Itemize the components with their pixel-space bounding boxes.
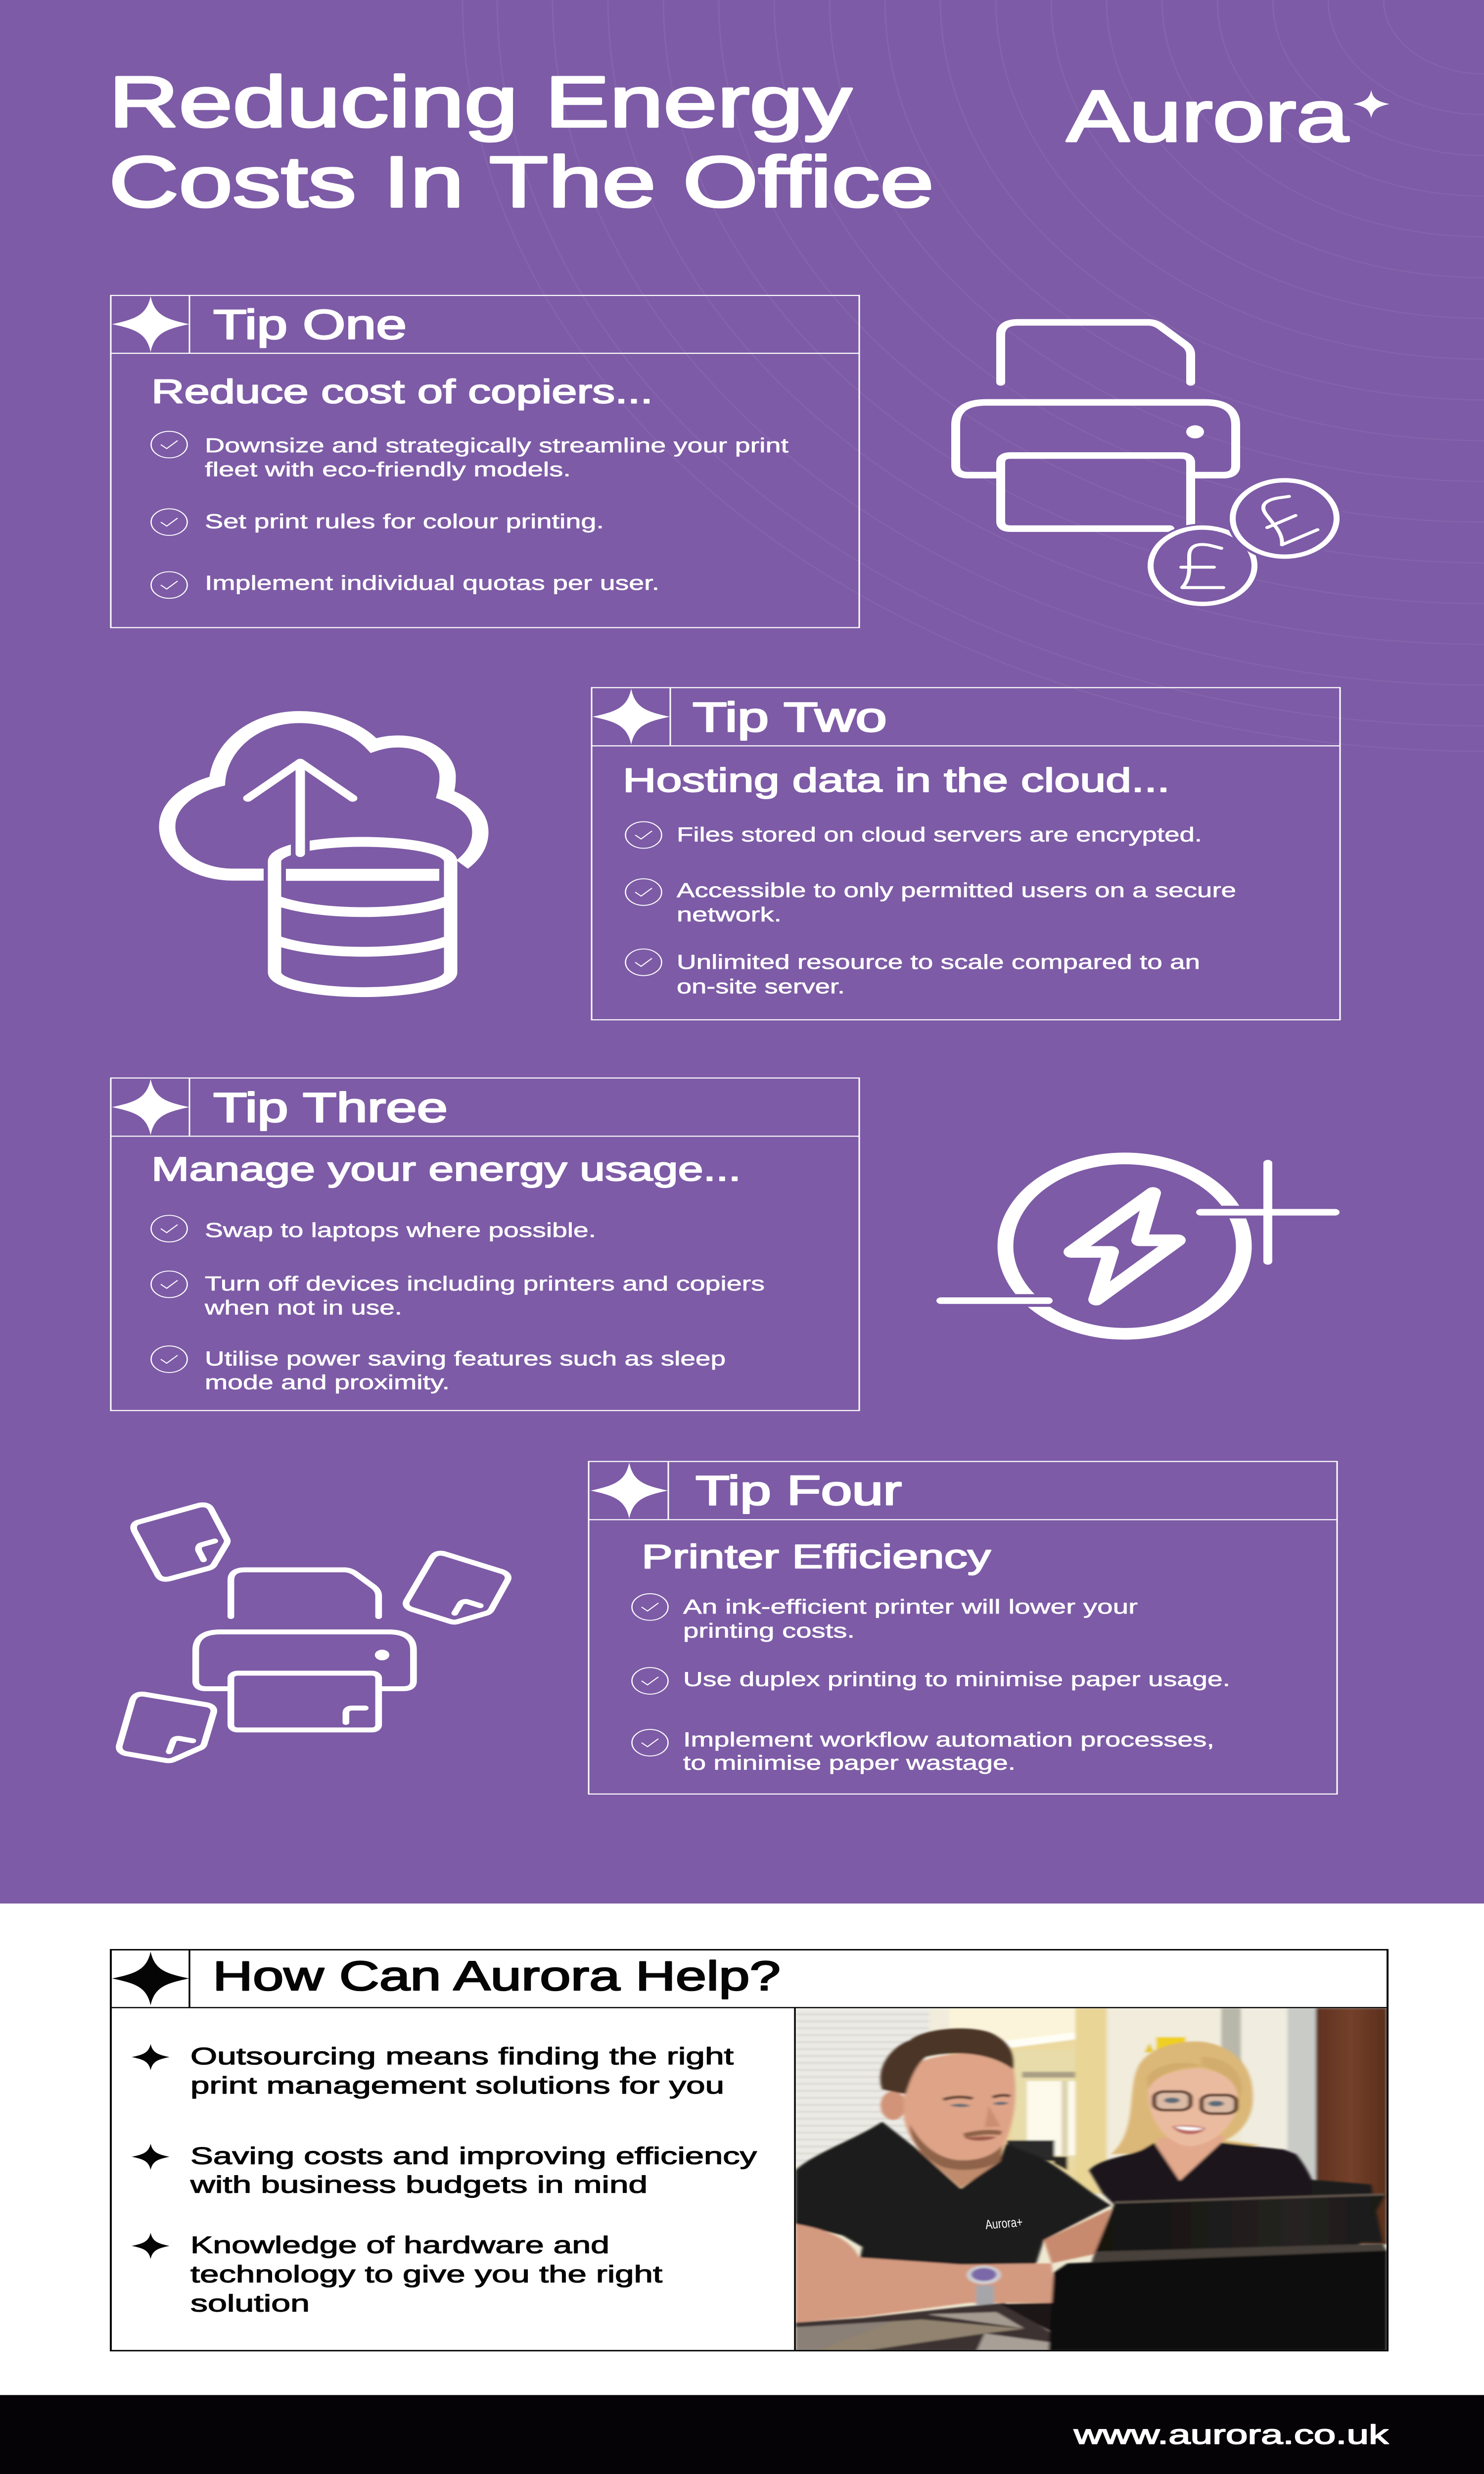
heading: How Can Aurora Help? [213,1953,781,1999]
title: Costs In The Office [109,142,934,222]
check item 2: when not in use. [204,1297,402,1319]
check item 1 [151,431,789,481]
heading: tip two: Tip Two [693,694,887,740]
check item 1: Downsize and strategically streamline your print [205,434,789,457]
check item 3 [632,1728,1214,1774]
icon: black star [112,1951,189,2005]
subheading: Manage your energy usage... [151,1151,741,1188]
check item 1 [632,1594,1138,1642]
icon: cloud upload with database [167,717,480,992]
subheading: Printer Efficiency [642,1538,991,1575]
check item 3 [625,949,1200,998]
icon: star [112,1079,189,1135]
bullet 3: solution [190,2290,310,2317]
bullet 3: technology to give you the right [190,2261,662,2287]
subheading: Hosting data in the cloud... [623,762,1170,799]
purple background [0,0,1484,1903]
check item 1: Swap to laptops where possible. [205,1219,596,1241]
bullet 3: Knowledge of hardware and [190,2232,609,2259]
check item 1: Files stored on cloud servers are encrypted. [677,824,1202,846]
heading: tip three: Tip Three [213,1085,448,1131]
heading: tip four: Tip Four [696,1468,902,1514]
panel: tip one [111,295,859,627]
check item 3: Unlimited resource to scale compared to an [677,951,1200,973]
shirt logo on photo: Aurora+ [984,2214,1023,2232]
check item 2: Turn off devices including printers and copiers [205,1273,765,1295]
check item 2 [625,879,1236,926]
bullet 2: Saving costs and improving efficiency [190,2143,757,2169]
logo: Aurora: Aurora [1067,76,1348,157]
white section background [0,1903,1484,2395]
check item 1: An ink-efficient printer will lower your [683,1596,1138,1618]
chair [1312,2180,1383,2242]
panel: how can aurora help [111,1950,1388,2351]
table [795,2303,1052,2351]
check item 2: Set print rules for colour printing. [205,511,604,533]
icon: printer with paper sheets [119,1505,508,1760]
icon: energy bolt in circle [941,1158,1335,1334]
panel: tip four [589,1462,1337,1794]
heading: tip one: Tip One [213,302,407,348]
bullet 1 [132,2043,734,2099]
check item 3: on-site server. [677,975,845,998]
footer bar [0,2395,1484,2474]
check item 3: mode and proximity. [205,1371,450,1394]
footer url: www.aurora.co.uk [1073,2420,1389,2450]
check item 2 [151,1271,765,1319]
subheading: Reduce cost of copiers... [151,373,653,411]
arms [795,2224,1056,2323]
check item 2: Use duplex printing to minimise paper usage. [683,1668,1230,1691]
icon: star [591,1463,668,1519]
man [795,2122,1111,2265]
check item 2: network. [677,904,782,926]
bullet 1: print management solutions for you [190,2072,724,2099]
title [109,61,934,222]
check item 3: Implement workflow automation processes, [683,1728,1214,1751]
bullet 1: Outsourcing means finding the right [190,2043,734,2070]
bullet 2 [132,2143,757,2198]
bullet 2: with business budgets in mind [190,2172,648,2198]
check item 2: Accessible to only permitted users on a secure [677,879,1236,902]
check item 1: fleet with eco-friendly models. [205,458,571,481]
check item 3 [151,1346,726,1394]
panel: tip two [592,688,1340,1020]
check item 1: printing costs. [683,1620,855,1642]
check item 3: Utilise power saving features such as sleep [205,1348,726,1370]
title: Reducing Energy [109,61,852,142]
icon: star [593,689,670,745]
laptops [1095,2195,1385,2252]
panel: tip three [111,1078,859,1411]
check item 3: Implement individual quotas per user. [205,572,659,594]
icon: printer with pound coins [956,322,1343,608]
photo: two colleagues at a laptop [795,2008,1387,2351]
bullet 3 [132,2232,662,2317]
icon: star [112,296,189,352]
woman [1111,2042,1260,2154]
check item 3: to minimise paper wastage. [683,1752,1016,1774]
